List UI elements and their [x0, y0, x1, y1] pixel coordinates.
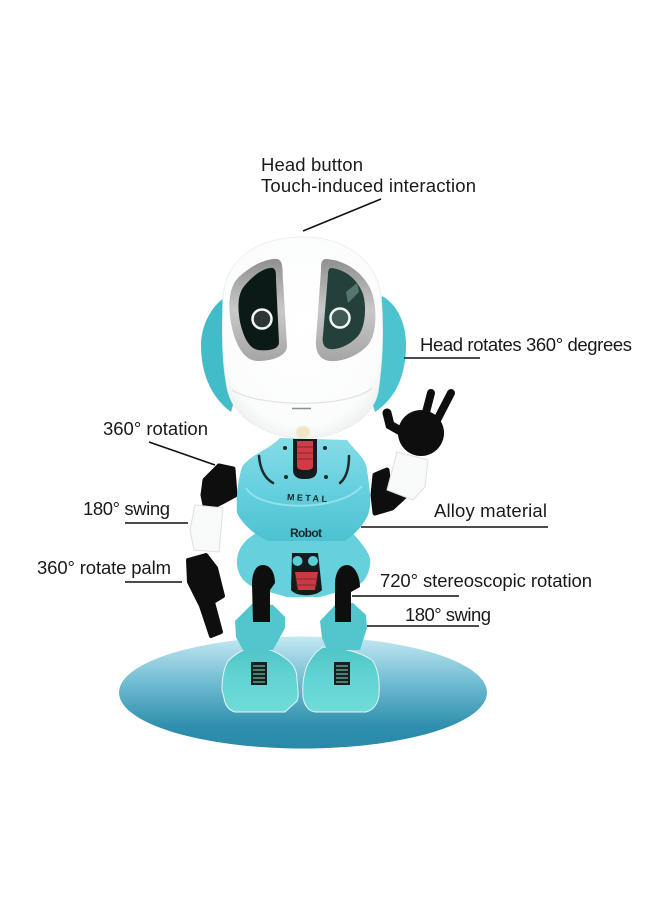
chest details: [259, 456, 349, 483]
right foot vent: [334, 662, 350, 685]
hips: [237, 530, 370, 597]
callout: left 180 swing: [83, 498, 188, 523]
callout: right 180 swing: 180° swing: [405, 604, 491, 625]
left eye: [229, 259, 287, 361]
head: [223, 237, 382, 438]
callout: left 180 swing: 180° swing: [83, 498, 170, 519]
right foot: [303, 647, 379, 712]
left sleeve: [190, 505, 223, 552]
robot figure: [188, 237, 451, 712]
right shin: [320, 603, 367, 650]
callout: alloy material: Alloy material: [434, 500, 547, 521]
callout: 360 rotation: 360° rotation: [103, 418, 208, 439]
callout: head button: Head button: [261, 154, 363, 175]
right ear: [365, 296, 406, 412]
callout: head button: [261, 154, 476, 231]
lower panel: [291, 553, 322, 595]
right leg: [335, 565, 360, 622]
callout: 720 stereoscopic rotation: 720° stereoscopic rotation: [380, 570, 592, 591]
right hand: [387, 393, 451, 456]
body label Robot: Robot: [290, 526, 322, 540]
chest vent: [293, 439, 317, 479]
neck: [296, 426, 310, 438]
torso: [237, 438, 370, 541]
right sleeve: [387, 452, 428, 500]
left shin: [235, 603, 285, 650]
callout: 360 rotation: [103, 418, 215, 465]
left foot vent: [251, 662, 267, 685]
body highlight: [246, 486, 362, 506]
callout: right 180 swing: [367, 604, 491, 626]
platform disc: [119, 636, 487, 748]
left foot: [222, 647, 298, 712]
right eye: [316, 259, 375, 361]
callout: 360 rotate palm: 360° rotate palm: [37, 557, 171, 578]
left leg: [252, 565, 275, 622]
right upper arm: [373, 470, 405, 513]
left ear: [201, 298, 240, 412]
left upper arm: [203, 466, 235, 510]
left hand: [188, 555, 223, 636]
callout: head rotates: Head rotates 360° degrees: [420, 334, 632, 355]
callout: head button: Touch-induced interaction: [261, 175, 476, 196]
body label METAL: METAL: [287, 492, 328, 504]
